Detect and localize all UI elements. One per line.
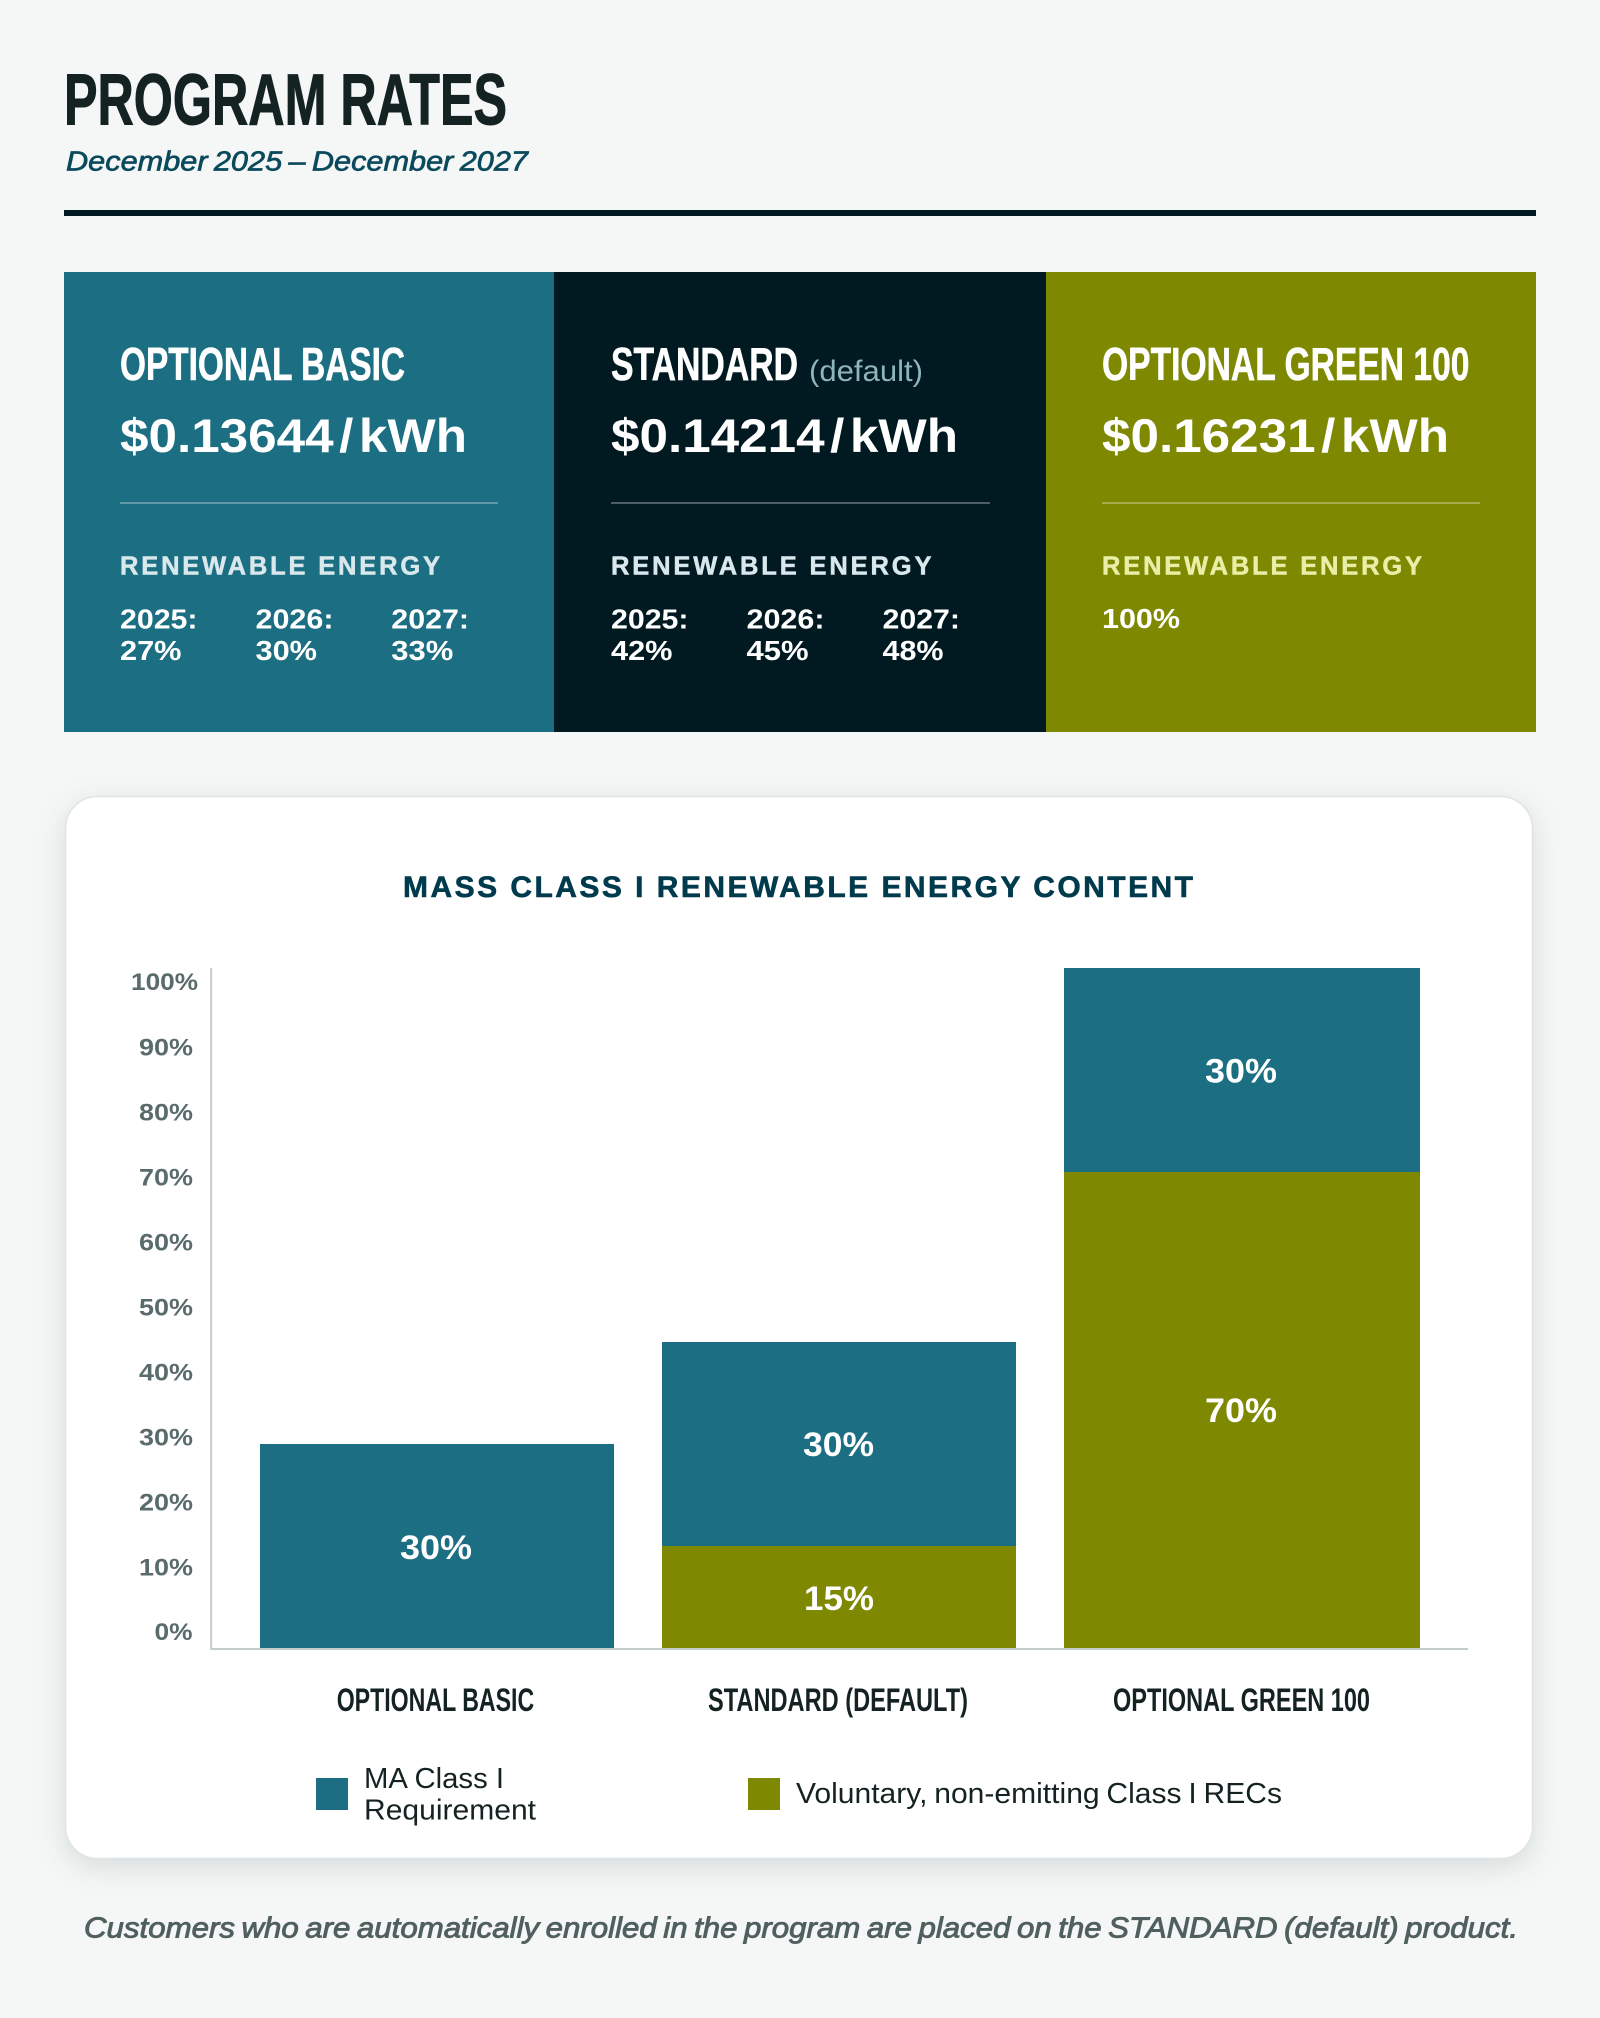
- legend: MA Class I requirement: Requirement: [364, 1794, 536, 1826]
- y axis labels: 30%: [139, 1424, 193, 1452]
- bar: optional green 100: 30%: [1205, 1052, 1277, 1090]
- legend: voluntary RECs: Voluntary, non-emitting Class I RECs: [796, 1778, 1282, 1810]
- y axis labels: 60%: [139, 1230, 193, 1256]
- renewable 2027: 48%: [882, 635, 944, 666]
- bar: standard: 30%: [803, 1426, 874, 1464]
- bar: optional basic: 30%: [400, 1529, 472, 1567]
- renewable energy label: RENEWABLE ENERGY: [1102, 552, 1422, 580]
- renewable 2025: [611, 604, 688, 666]
- price: $0.14214 / kWh: [611, 409, 958, 462]
- y axis labels: 10%: [139, 1554, 193, 1582]
- renewable 2026: [746, 604, 824, 666]
- panel: optional basic: [64, 272, 554, 732]
- plan name: STANDARD: [611, 338, 798, 390]
- renewable 2025: 27%: [120, 635, 182, 666]
- y axis labels: 90%: [139, 1034, 193, 1062]
- y axis labels: 80%: [139, 1100, 193, 1126]
- renewable 2027: [882, 604, 960, 666]
- legend: MA Class I requirement: MA Class I: [364, 1763, 504, 1795]
- renewable 2025: [120, 604, 198, 666]
- renewable 2026: 30%: [256, 635, 317, 666]
- x axis labels: [337, 1682, 1370, 1718]
- y axis labels: 70%: [139, 1164, 193, 1192]
- footnote: Customers who are automatically enrolled in the program are placed on the STANDARD (default) product.: [84, 1912, 1518, 1944]
- renewable 2026: 2026:: [256, 604, 334, 634]
- renewable 2027: 2027:: [391, 604, 469, 634]
- x axis labels: STANDARD (DEFAULT): [708, 1682, 968, 1718]
- y axis labels: 50%: [139, 1294, 193, 1322]
- y axis labels: 20%: [139, 1490, 193, 1516]
- renewable energy label: RENEWABLE ENERGY: [611, 552, 932, 580]
- renewable energy label: RENEWABLE ENERGY: [120, 552, 440, 580]
- renewable 2026: 45%: [746, 635, 809, 666]
- bar: standard: [662, 1342, 1016, 1648]
- bar: optional basic: [260, 1444, 614, 1648]
- subtitle: date range: December 2025 – December 2027: [66, 146, 530, 176]
- plan name: OPTIONAL GREEN 100: [1102, 338, 1470, 390]
- x axis labels: OPTIONAL BASIC: [337, 1682, 534, 1718]
- bar: optional green 100: 70%: [1205, 1392, 1277, 1430]
- plan name: OPTIONAL BASIC: [120, 338, 405, 390]
- renewable 2026: 2026:: [746, 604, 824, 634]
- renewable 2026: [256, 604, 334, 666]
- y axis labels: 100%: [131, 969, 198, 996]
- renewable 2025: 2025:: [611, 604, 688, 634]
- panel: chart card: [66, 796, 1532, 1858]
- y axis labels: 0%: [154, 1619, 192, 1646]
- renewable 2027: 33%: [391, 635, 453, 666]
- renewable 2025: 2025:: [120, 604, 198, 634]
- bar: optional green 100: [1064, 968, 1420, 1648]
- bar: standard: 15%: [804, 1580, 874, 1618]
- renewable 100 percent: 100%: [1102, 603, 1180, 634]
- panel: standard: [554, 272, 1046, 732]
- chart axes: [211, 968, 1468, 1649]
- y axis labels: [131, 969, 198, 1646]
- y axis labels: 40%: [139, 1360, 193, 1386]
- price: $0.13644 / kWh: [120, 409, 467, 462]
- panel: optional green 100: [1046, 272, 1536, 732]
- renewable 2027: 2027:: [882, 604, 960, 634]
- renewable 2027: [391, 604, 469, 666]
- x axis labels: OPTIONAL GREEN 100: [1113, 1682, 1370, 1718]
- title: PROGRAM RATES: [64, 60, 507, 140]
- default tag: (default): [809, 355, 923, 388]
- renewable 2025: 42%: [611, 635, 673, 666]
- price: $0.16231 / kWh: [1102, 409, 1449, 462]
- chart title: MASS CLASS I RENEWABLE ENERGY CONTENT: [403, 871, 1193, 904]
- legend: MA Class I requirement: [316, 1763, 536, 1826]
